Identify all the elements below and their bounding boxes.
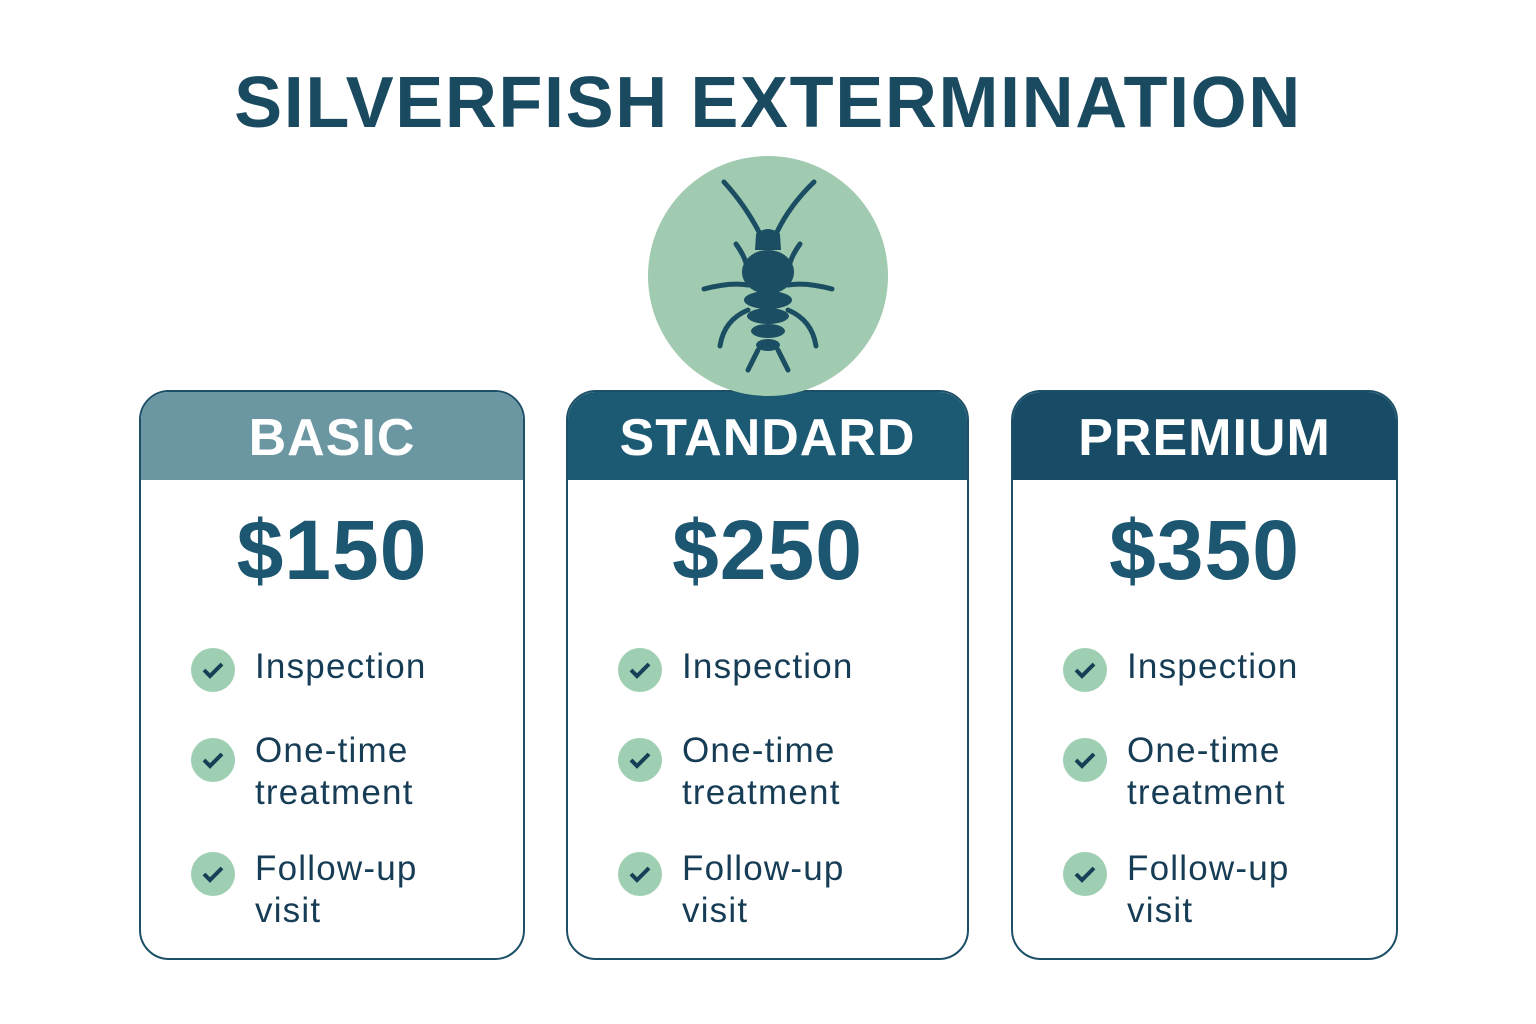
feature list: standard: Inspection — [682, 647, 854, 686]
feature list: premium: One-time — [1127, 731, 1281, 770]
price: standard: $250 — [672, 503, 863, 597]
feature list: standard: treatment — [682, 773, 841, 812]
title: SILVERFISH EXTERMINATION — [234, 63, 1302, 143]
feature list: premium — [1063, 647, 1299, 930]
icon: silverfish in circle — [648, 156, 888, 396]
feature list: premium: visit — [1127, 891, 1193, 930]
feature list: premium: Inspection — [1127, 647, 1299, 686]
header: premium — [1013, 392, 1396, 480]
feature list: basic: Follow-up — [255, 849, 418, 888]
header: standard — [568, 392, 967, 480]
feature list: basic: visit — [255, 891, 321, 930]
card: basic — [139, 390, 525, 960]
card: standard — [566, 390, 969, 960]
header: basic: BASIC — [249, 409, 415, 467]
feature list: premium: Follow-up — [1127, 849, 1290, 888]
feature list: standard: One-time — [682, 731, 836, 770]
header: premium: PREMIUM — [1078, 409, 1331, 467]
price: premium: $350 — [1109, 503, 1300, 597]
feature list: basic: One-time — [255, 731, 409, 770]
feature list: basic: treatment — [255, 773, 414, 812]
header: basic — [141, 392, 523, 480]
feature list: premium: treatment — [1127, 773, 1286, 812]
feature list: basic: Inspection — [255, 647, 427, 686]
feature list: standard: Follow-up — [682, 849, 845, 888]
feature list: standard: visit — [682, 891, 748, 930]
price: basic: $150 — [237, 503, 427, 597]
card: premium — [1011, 390, 1398, 960]
feature list: basic — [191, 647, 427, 930]
header: standard: STANDARD — [620, 409, 915, 467]
feature list: standard — [618, 647, 854, 930]
